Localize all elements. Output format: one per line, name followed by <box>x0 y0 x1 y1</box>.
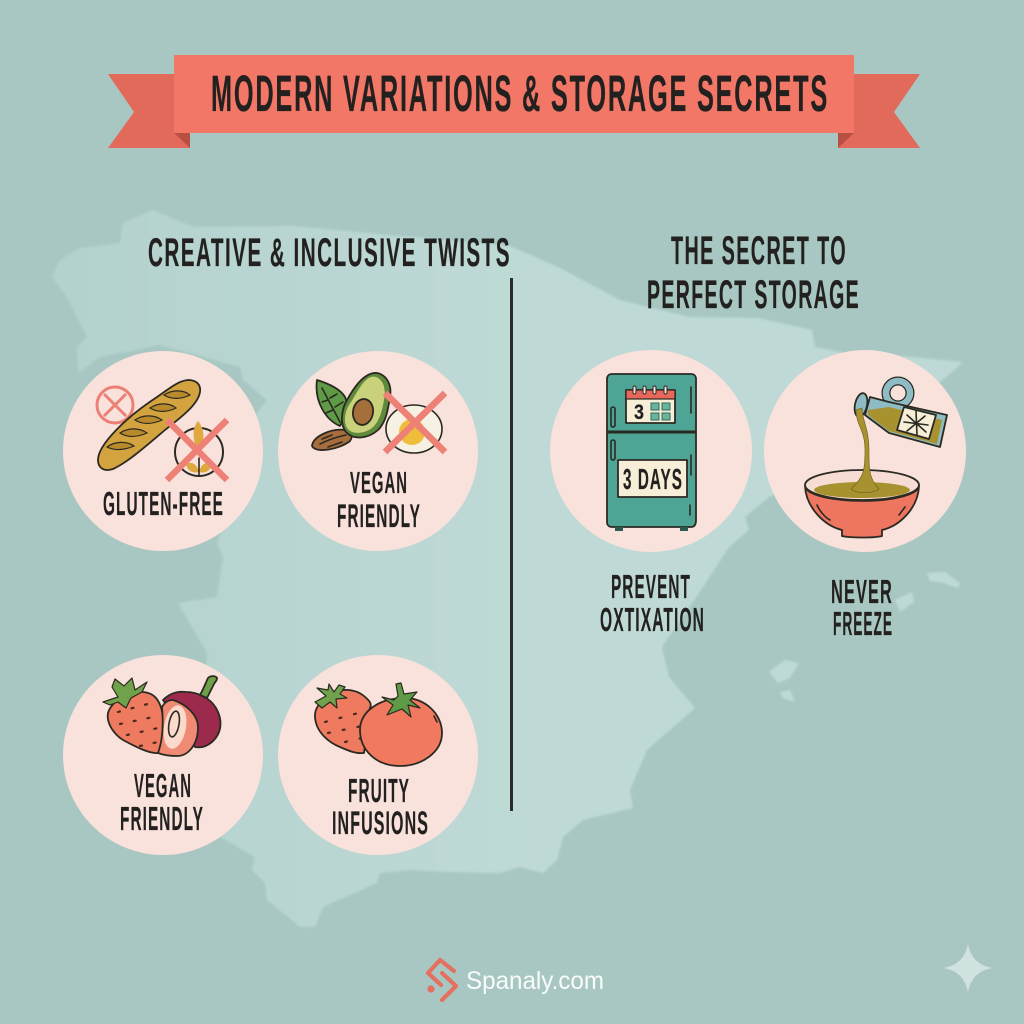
panel: vegan friendly bottom <box>63 655 263 855</box>
brand name: Spanaly.com <box>466 967 604 995</box>
label: vegan friendly: VEGAN <box>134 767 192 804</box>
icon: fridge <box>607 374 696 531</box>
icon: crossed wheat <box>167 420 227 480</box>
right ribbon tail <box>838 74 920 148</box>
label: never freeze <box>831 573 893 642</box>
panel: vegan friendly top <box>278 351 478 551</box>
panel: fruity infusions: INFUSIONS <box>332 805 429 841</box>
icon: crossed circle <box>97 387 133 423</box>
3 days label <box>618 460 687 497</box>
icon: almond <box>312 430 352 450</box>
title banner <box>108 55 920 148</box>
background map of Iberia <box>52 210 962 927</box>
icon: oil stream <box>851 408 879 493</box>
icon: bowl of oil <box>805 470 919 538</box>
icon: tomato <box>360 683 442 766</box>
icon: baguette <box>98 380 200 470</box>
label: vegan friendly: VEGAN <box>350 465 408 500</box>
icon: oil bottle <box>853 381 947 447</box>
3 days label: 3 DAYS <box>623 464 683 496</box>
sparkle star <box>944 944 992 992</box>
panel: vegan friendly top: FRIENDLY <box>337 498 421 534</box>
calendar magnet <box>626 386 675 424</box>
panel: never freeze: NEVER <box>831 573 893 610</box>
label: prevent oxidation <box>600 568 705 638</box>
label: prevent oxidation: PREVENT <box>611 568 691 605</box>
panel: never freeze: FREEZE <box>833 605 893 642</box>
icon: logo mark <box>428 960 456 1000</box>
icon: plum <box>163 676 221 747</box>
heading: the secret to perfect storage <box>647 229 860 317</box>
icon: cut fruit <box>158 700 198 756</box>
panel: never freeze <box>764 350 966 642</box>
icon: crossed egg <box>385 393 445 453</box>
center divider <box>510 278 513 811</box>
calendar magnet: 3 <box>634 401 644 424</box>
label: fruity infusions: FRUITY <box>348 772 410 809</box>
heading: creative and inclusive twists: CREATIVE & INCLUSIVE TWISTS <box>148 231 511 275</box>
panel: vegan friendly bottom: FRIENDLY <box>120 800 204 837</box>
ribbon fold shadows <box>174 133 854 148</box>
panel: gluten-free <box>63 351 263 551</box>
panel: fridge <box>550 350 752 638</box>
heading: the secret to perfect storage: THE SECRET TO <box>671 229 847 273</box>
panel: gluten-free: GLUTEN-FREE <box>103 485 224 522</box>
icon: leaf <box>317 380 347 426</box>
left ribbon tail <box>108 74 190 148</box>
label: vegan friendly <box>120 767 204 837</box>
footer logo <box>428 960 604 1000</box>
label: vegan friendly <box>337 465 421 534</box>
icon: strawberry <box>315 684 371 753</box>
panel: fruity infusions <box>278 655 478 855</box>
icon: avocado <box>342 373 390 438</box>
icon: strawberry <box>103 678 163 753</box>
label: fruity infusions <box>332 772 429 841</box>
panel: fridge: OXTIXATION <box>600 601 705 638</box>
ribbon main band <box>174 55 854 133</box>
